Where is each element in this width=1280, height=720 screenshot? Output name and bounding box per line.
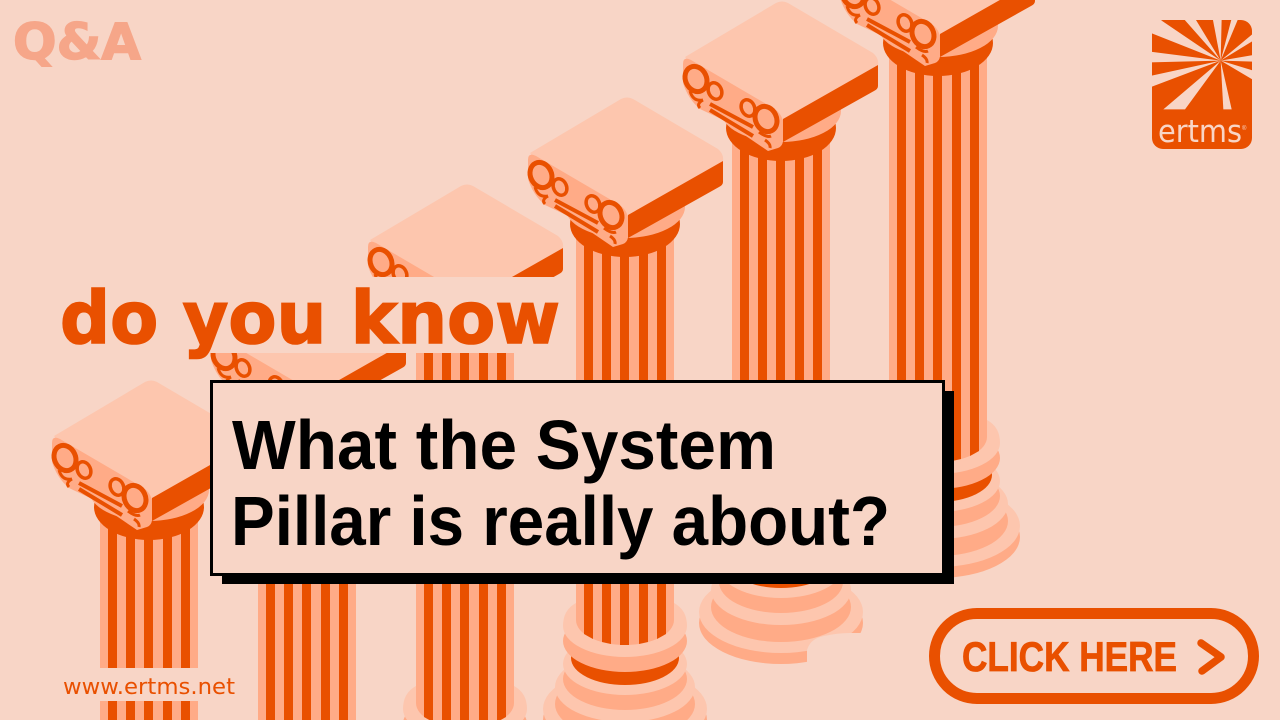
icon: chevron arrow bbox=[1201, 643, 1221, 671]
pillar 6 bbox=[838, 0, 1035, 578]
pillar 1 bbox=[52, 380, 210, 720]
heading: do you know: do you know bbox=[60, 276, 560, 360]
question box bbox=[212, 382, 954, 584]
logo: ertms: ® bbox=[1242, 125, 1247, 132]
pillar 5 base cut-out bbox=[807, 633, 880, 668]
website link bbox=[57, 668, 240, 701]
question box: Pillar is really about? bbox=[231, 482, 890, 560]
pillar 3 bbox=[368, 184, 563, 720]
click here button: CLICK HERE bbox=[962, 633, 1177, 680]
pillar 4 bbox=[528, 98, 723, 720]
logo: ertms bbox=[1150, 18, 1253, 150]
website link: www.ertms.net bbox=[63, 675, 235, 700]
click here button bbox=[934, 614, 1254, 698]
pillar 5 bbox=[681, 0, 878, 664]
pillar 2 bbox=[210, 353, 406, 720]
Q&A label: Q&A bbox=[13, 13, 141, 71]
logo: ertms: ertms bbox=[1158, 114, 1242, 150]
question box: What the System bbox=[232, 406, 776, 484]
